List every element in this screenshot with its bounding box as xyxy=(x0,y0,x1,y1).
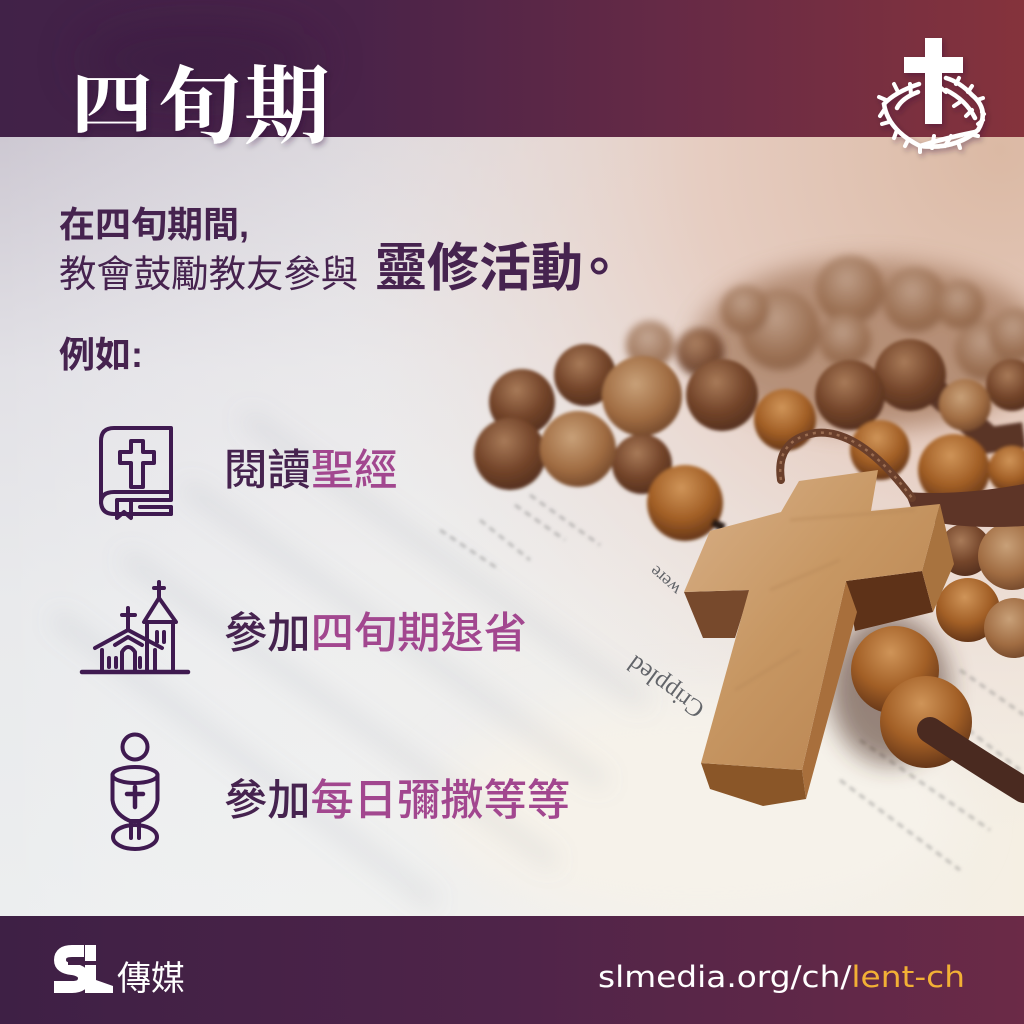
emphasis: spiritual activities: 靈修活動。 xyxy=(375,240,625,298)
top band xyxy=(0,0,1024,137)
logo: SL media xyxy=(54,945,185,998)
wooden cross xyxy=(684,433,954,806)
heading line 1: 在四旬期間, xyxy=(59,204,249,245)
heading line 2: 教會鼓勵教友參與 xyxy=(59,253,358,295)
item 1 text: 閱讀聖經 xyxy=(224,447,398,495)
icon: bible xyxy=(101,428,171,518)
website url: slmedia.org/ch/ lent-ch xyxy=(598,960,965,994)
title: 期 xyxy=(244,37,330,161)
item 3 text: 參加每日彌撒等等 xyxy=(224,777,570,825)
footer band xyxy=(0,916,1024,1024)
title xyxy=(70,37,330,161)
subheading: for example: 例如: xyxy=(59,334,143,375)
book text in photo xyxy=(622,562,710,723)
book text in photo: Crippled xyxy=(622,649,710,723)
rosary near beads and cord xyxy=(830,484,1024,790)
icon: cross and crown of thorns xyxy=(879,38,984,152)
heading text xyxy=(59,204,625,298)
logo wordmark: 傳媒 xyxy=(117,960,185,998)
photo background: paper xyxy=(0,137,1024,920)
title: 旬 xyxy=(158,40,242,161)
book text in photo: were xyxy=(645,562,685,600)
icon: chalice and host xyxy=(112,734,158,849)
rosary mid beads xyxy=(474,339,1024,541)
title: 四 xyxy=(70,51,154,146)
item 2 text: 參加四旬期退省 xyxy=(224,610,527,658)
icon: church xyxy=(82,582,188,672)
rosary far beads, blurred xyxy=(626,256,1024,430)
logo mark xyxy=(54,945,113,993)
